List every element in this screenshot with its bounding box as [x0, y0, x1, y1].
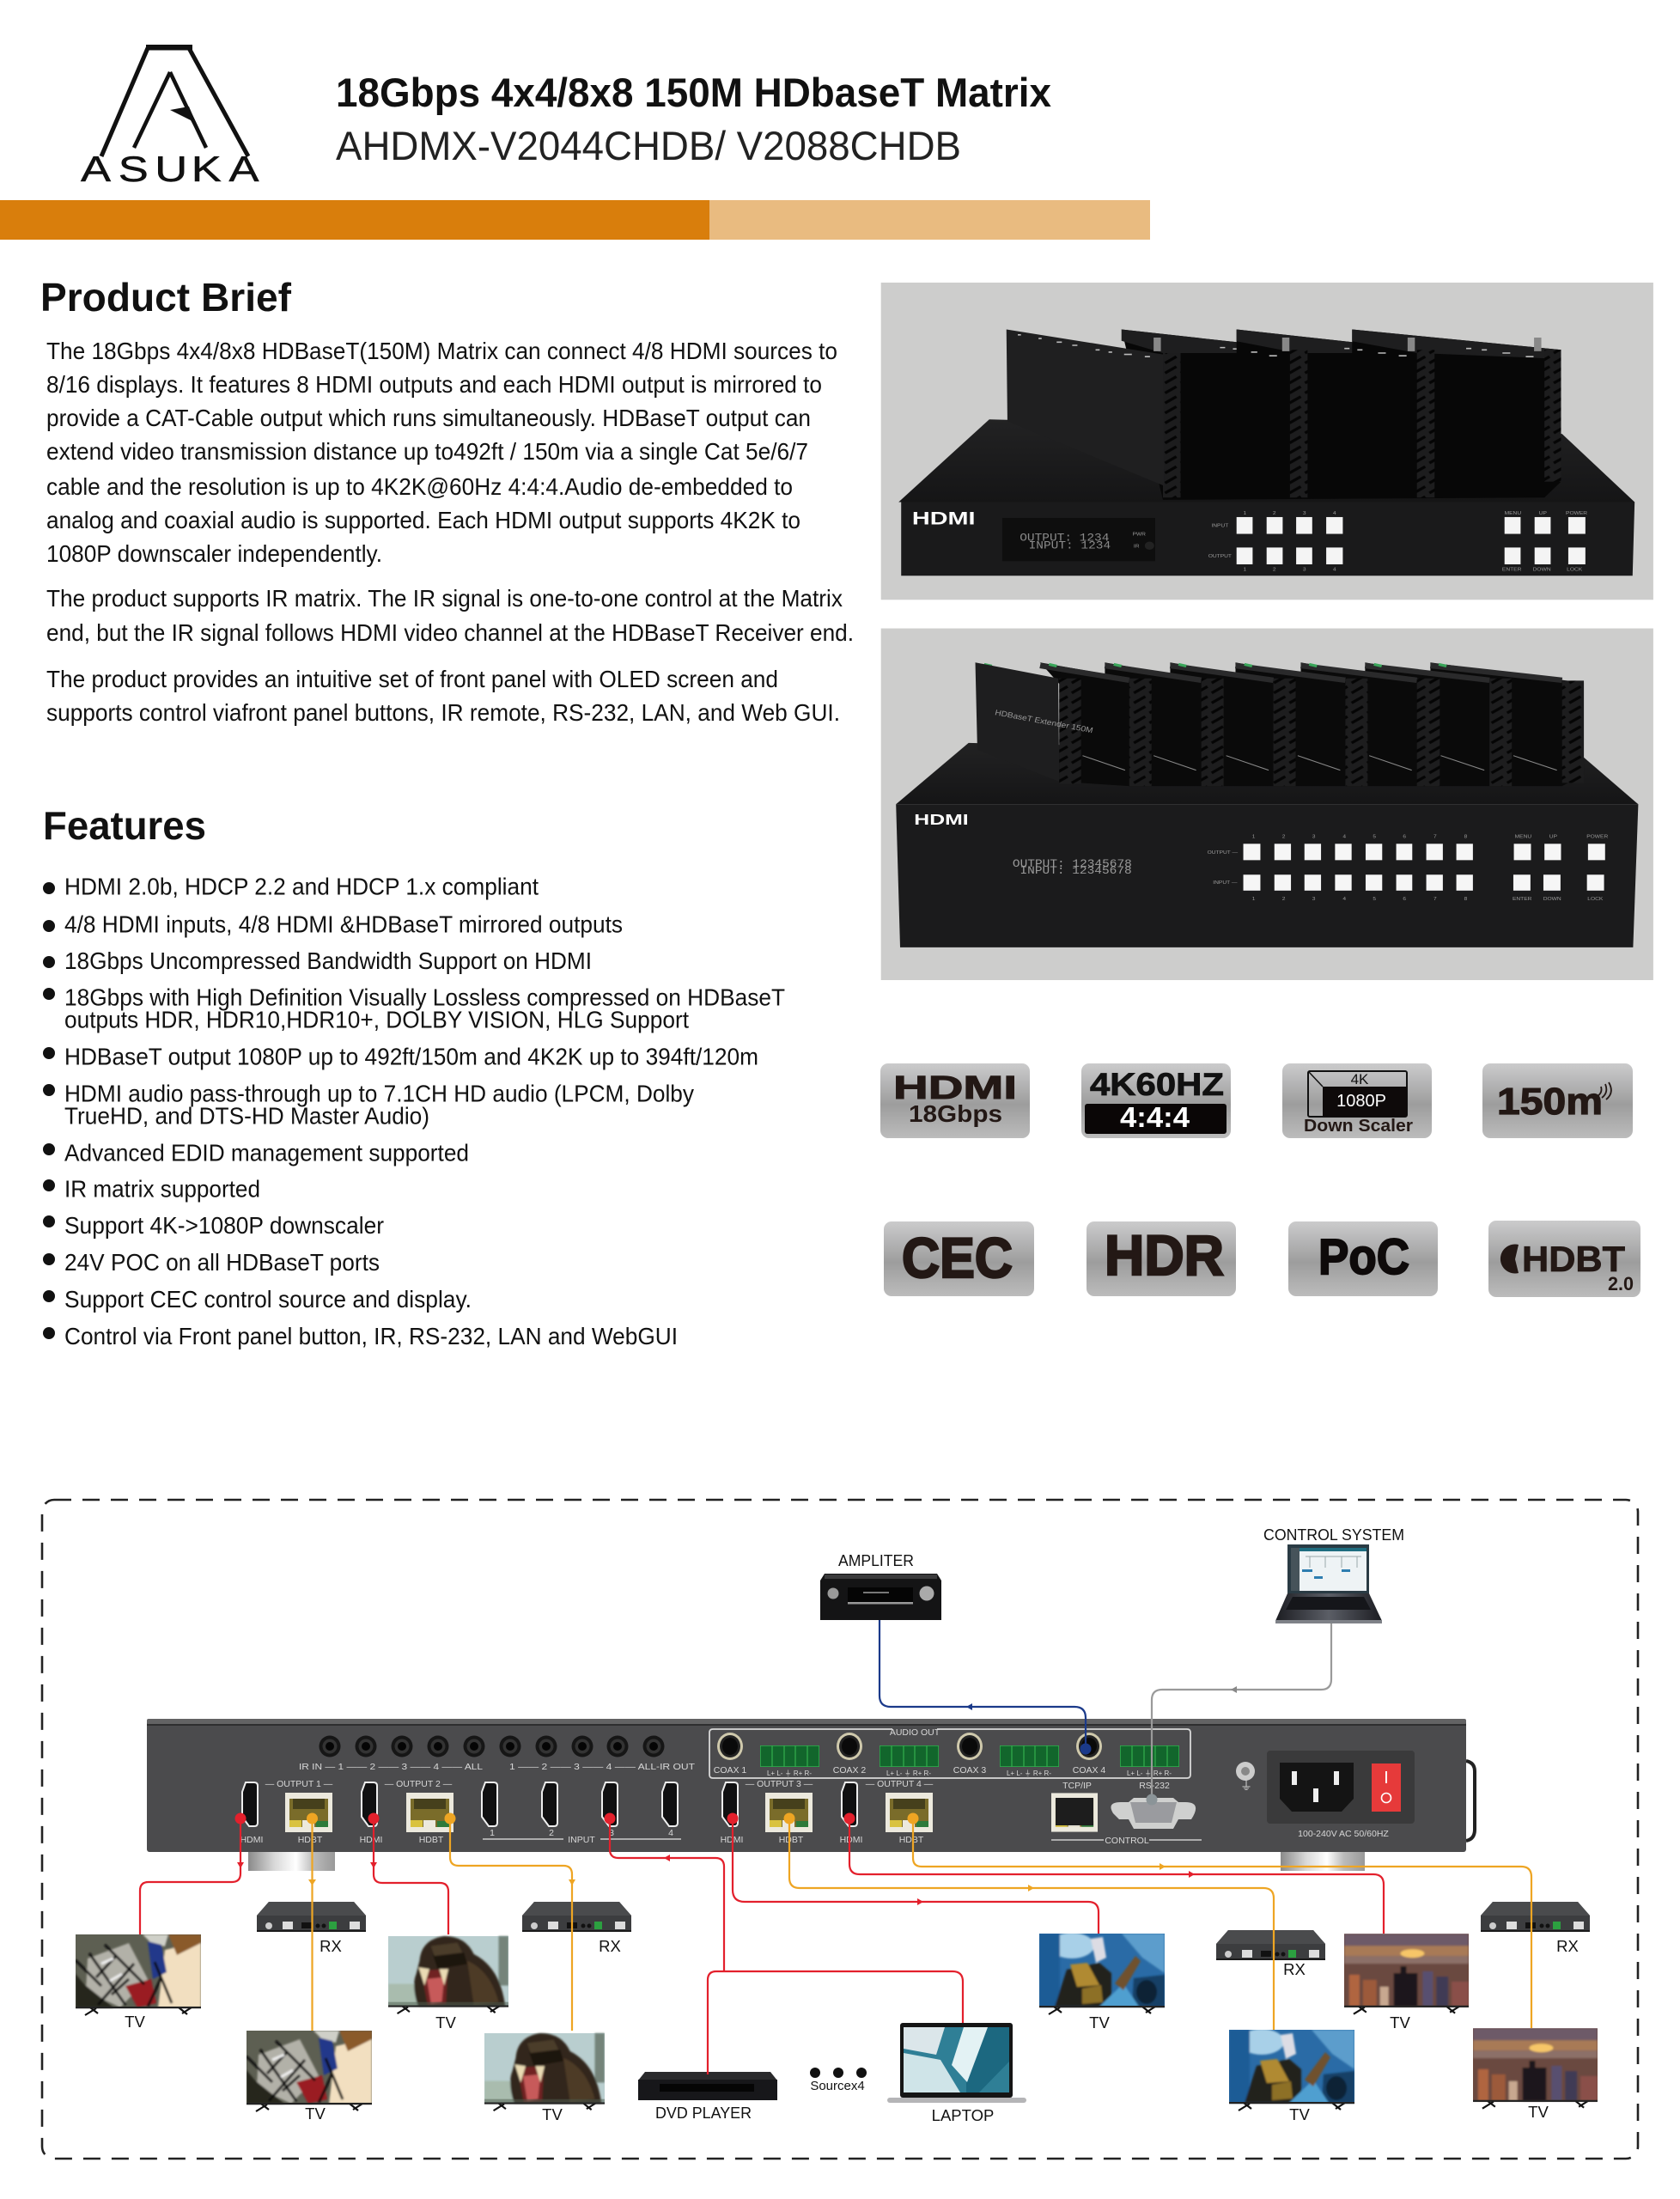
panel: connection diagram dashed frame: [42, 1500, 1638, 2159]
control ports: TCP/IP: [1062, 1781, 1092, 1791]
control ports: RS-232: [1139, 1781, 1170, 1791]
IR jacks: 1 —— 2 —— 3 —— 4 —— ALL-IR OUT: [509, 1762, 696, 1772]
badge: 4K 1080P Down Scaler: 4K: [1351, 1071, 1369, 1087]
panel: 4x4 matrix product photo: POWER: [1566, 510, 1588, 516]
panel: 8x8 matrix product photo: 1: [1252, 896, 1256, 902]
TV 6: [1344, 1934, 1469, 2014]
device: rear panel of matrix: [147, 1719, 1475, 1871]
TV 2: [388, 1936, 508, 2013]
panel: 4x4 matrix product photo: 3: [1303, 567, 1306, 572]
HDMI and HDBaseT ports: 4: [668, 1828, 673, 1838]
audio out group: L+ L- ⏚ R+ R-: [1127, 1770, 1172, 1777]
icon: source dots: [810, 2068, 867, 2078]
badge: HDMI 18Gbps: 18Gbps: [909, 1100, 1002, 1127]
HDMI and HDBaseT ports: HDBT: [298, 1835, 323, 1845]
panel: 4x4 matrix product photo: INPUT: 1234: [1029, 540, 1111, 552]
panel: 8x8 matrix product photo: 2: [1282, 834, 1286, 839]
diagram labels: TV: [1289, 2105, 1310, 2123]
subtitle: model numbers: AHDMX-V2044CHDB/ V2088CHDB: [336, 123, 961, 168]
HDMI and HDBaseT ports: — OUTPUT 1 —: [265, 1779, 333, 1789]
power inlet and switch: [1267, 1751, 1415, 1839]
text block: product brief paragraphs: supports control viafront panel buttons, IR remote, RS-232, LAN, and Web GUI.: [46, 699, 840, 726]
icon: laptop source: [887, 2023, 1026, 2103]
panel: 4x4 matrix product photo: 2: [1273, 510, 1276, 516]
audio out group: COAX 1: [714, 1765, 746, 1776]
feature list: Support CEC control source and display.: [64, 1286, 472, 1313]
badge: 4K 1080P Down Scaler: Down Scaler: [1304, 1117, 1413, 1136]
badge: 4K60HZ 4:4:4: 4:4:4: [1120, 1101, 1190, 1133]
text block: product brief paragraphs: 8/16 displays. It features 8 HDMI outputs and each HDMI output is mirrored to: [46, 371, 822, 398]
TV 3: [247, 2031, 372, 2111]
audio out group: L+ L- ⏚ R+ R-: [767, 1770, 812, 1777]
text block: product brief paragraphs: provide a CAT-Cable output which runs simultaneously. HDBaseT output can: [46, 405, 811, 431]
panel: 8x8 matrix product photo: OUTPUT —: [1208, 850, 1239, 856]
feature list: Advanced EDID management supported: [64, 1139, 469, 1167]
audio out group: L+ L- ⏚ R+ R-: [1007, 1770, 1051, 1777]
feature list: 24V POC on all HDBaseT ports: [64, 1249, 380, 1276]
panel: 8x8 matrix product photo: 1: [1252, 834, 1256, 839]
panel: 4x4 matrix product photo: INPUT: [1211, 523, 1229, 528]
TV 7: [1229, 2029, 1354, 2111]
diagram labels: [125, 1937, 1579, 2124]
panel: 8x8 matrix product photo: 7: [1433, 834, 1437, 839]
panel: 8x8 matrix product photo: 3: [1312, 834, 1316, 839]
panel: 4x4 matrix product photo: DOWN: [1533, 567, 1551, 572]
ground screw: ⏚: [1240, 1779, 1252, 1793]
badge: HDMI 18Gbps: HDMI: [893, 1070, 1017, 1106]
panel: 8x8 matrix product photo: ENTER: [1513, 896, 1532, 902]
panel: 4x4 matrix product photo: [881, 283, 1653, 600]
heading: Features: Features: [43, 803, 206, 848]
panel: 8x8 matrix product photo: 8: [1464, 834, 1468, 839]
IR jacks: [299, 1735, 696, 1772]
panel: 8x8 matrix product photo: 5: [1373, 834, 1377, 839]
panel: 4x4 matrix product photo: OUTPUT: 1234: [1020, 533, 1109, 545]
RX receiver 3: [1216, 1930, 1325, 1960]
panel: 8x8 matrix product photo: 8: [1464, 896, 1468, 902]
diagram labels: TV: [125, 2013, 145, 2031]
wires: orange HDBaseT lines: [313, 1818, 1531, 2031]
RX receiver 4: [1481, 1902, 1590, 1932]
badge: CEC: CEC: [902, 1226, 1013, 1289]
audio out group: L+ L- ⏚ R+ R-: [886, 1770, 931, 1777]
wire: grey control line: [1152, 1623, 1331, 1800]
HDMI and HDBaseT ports: HDMI: [840, 1835, 862, 1845]
text block: product brief paragraphs: extend video transmission distance up to492ft / 150m via a single Cat 5e/6/7: [46, 438, 808, 465]
panel: 4x4 matrix product photo: ENTER: [1502, 567, 1522, 572]
side handle: [1466, 1761, 1475, 1841]
rear feet: [248, 1852, 1365, 1871]
HDMI and HDBaseT ports: 2: [549, 1828, 554, 1838]
HDMI and HDBaseT ports: HDBT: [779, 1835, 804, 1845]
label: CONTROL SYSTEM: CONTROL SYSTEM: [1263, 1526, 1404, 1544]
ground screw: [1236, 1762, 1255, 1793]
feature list: outputs HDR, HDR10,HDR10+, DOLBY VISION, HLG Support: [64, 1007, 689, 1032]
badge: CEC: [884, 1221, 1034, 1296]
panel: 4x4 matrix product photo: MENU: [1505, 510, 1522, 516]
panel: 8x8 matrix product photo: INPUT —: [1213, 880, 1238, 886]
wire: blue coax to amplifier: [880, 1620, 1086, 1749]
panel: 8x8 matrix product photo: POWER: [1586, 834, 1609, 839]
badge: PoC: [1288, 1221, 1438, 1296]
panel: 4x4 matrix product photo: PWR: [1132, 532, 1146, 538]
HDMI and HDBaseT ports: HDBT: [419, 1835, 444, 1845]
panel: 8x8 matrix product photo: MENU: [1515, 834, 1532, 839]
panel: 8x8 matrix product photo: INPUT: 12345678: [1020, 866, 1132, 878]
title: 18Gbps 4x4/8x8 150M HDbaseT Matrix: [336, 70, 1051, 115]
feature list: HDBaseT output 1080P up to 492ft/150m and 4K2K up to 394ft/120m: [64, 1043, 758, 1070]
badge: PoC: PoC: [1318, 1229, 1409, 1285]
badge: HDBaseT 2.0: HDBT: [1522, 1239, 1625, 1279]
diagram labels: TV: [1390, 2013, 1410, 2031]
panel: 4x4 matrix product photo: 4: [1333, 567, 1336, 572]
panel: 8x8 matrix product photo: 4: [1342, 896, 1347, 902]
diagram labels: LAPTOP: [932, 2106, 994, 2124]
panel: 4x4 matrix product photo: IR: [1134, 544, 1140, 549]
panel: 8x8 matrix product photo: 5: [1373, 896, 1377, 902]
panel: 4x4 matrix product photo: LOCK: [1567, 567, 1583, 572]
text block: product brief paragraphs: analog and coaxial audio is supported. Each HDMI output supports 4K2K to: [46, 507, 800, 533]
text block: product brief paragraphs: The product provides an intuitive set of front panel with OLED screen and: [46, 666, 778, 692]
badge: HDMI 18Gbps: [880, 1063, 1030, 1138]
HDMI and HDBaseT ports: HDMI: [240, 1835, 263, 1845]
badge: 4K 1080P Down Scaler: 1080P: [1336, 1092, 1386, 1111]
label: AMPLITER: AMPLITER: [838, 1551, 914, 1569]
feature list: HDMI 2.0b, HDCP 2.2 and HDCP 1.x compliant: [64, 873, 539, 900]
TV 8: [1473, 2028, 1598, 2109]
audio out group: [709, 1727, 1190, 1778]
panel: 4x4 matrix product photo: 2: [1273, 567, 1276, 572]
badge: HDBaseT 2.0: [1488, 1221, 1640, 1297]
text block: product brief paragraphs: end, but the IR signal follows HDMI video channel at the HDBaseT Receiver end.: [46, 619, 854, 646]
diagram labels: TV: [305, 2105, 326, 2123]
badge: HDR: [1087, 1221, 1236, 1296]
badge: 150m: [1482, 1063, 1633, 1138]
logo: ASUKA: ASUKA: [81, 149, 259, 190]
HDMI and HDBaseT ports: 1: [490, 1828, 495, 1838]
HDMI and HDBaseT ports: INPUT: [568, 1835, 595, 1845]
icon: amplifier: [820, 1574, 941, 1620]
panel: 8x8 matrix product photo: 6: [1403, 896, 1407, 902]
HDMI and HDBaseT ports: HDMI: [360, 1835, 382, 1845]
diagram labels: TV: [1089, 2013, 1110, 2031]
audio out group: AUDIO OUT: [890, 1727, 940, 1738]
badge: 4K60HZ 4:4:4: [1081, 1063, 1231, 1138]
header colour bar: [0, 200, 1150, 240]
HDMI and HDBaseT ports: [240, 1779, 934, 1845]
badge: HDR: HDR: [1105, 1223, 1224, 1287]
feature list: 4/8 HDMI inputs, 4/8 HDMI &HDBaseT mirrored outputs: [64, 911, 623, 938]
panel: 4x4 matrix product photo: 1: [1244, 510, 1247, 516]
HDMI and HDBaseT ports: HDBT: [899, 1835, 924, 1845]
diagram labels: RX: [599, 1937, 621, 1955]
diagram labels: TV: [542, 2105, 563, 2123]
chassis: [147, 1719, 1466, 1852]
panel: 8x8 matrix product photo: 3: [1312, 896, 1316, 902]
diagram labels: TV: [435, 2013, 456, 2031]
feature list: [43, 873, 785, 1349]
audio out group: COAX 4: [1073, 1765, 1105, 1776]
RX receiver 1: [257, 1902, 366, 1932]
panel: 8x8 matrix product photo: UP: [1549, 834, 1557, 839]
TV 1: [76, 1934, 201, 2015]
panel: 4x4 matrix product photo: OUTPUT: [1208, 553, 1232, 559]
icon: control laptop: [1275, 1544, 1382, 1623]
feature list: 18Gbps with High Definition Visually Lossless compressed on HDBaseT: [64, 984, 785, 1010]
power inlet and switch: 100-240V AC 50/60HZ: [1298, 1829, 1389, 1839]
badge: 4K 1080P Down Scaler: [1282, 1063, 1432, 1138]
TV 5: [1039, 1933, 1165, 2014]
HDMI and HDBaseT ports: — OUTPUT 2 —: [385, 1779, 453, 1789]
panel: 4x4 matrix product photo: HDMI: [912, 508, 976, 528]
panel: 8x8 matrix product photo: HDMI: [914, 812, 969, 829]
badge: 150m: 150m: [1497, 1081, 1603, 1123]
feature list: Support 4K->1080P downscaler: [64, 1212, 384, 1239]
feature list: IR matrix supported: [64, 1175, 260, 1203]
panel: 8x8 matrix product photo: LOCK: [1587, 896, 1604, 902]
control ports: CONTROL: [1105, 1836, 1149, 1846]
badge: 4K60HZ 4:4:4: 4K60HZ: [1090, 1067, 1224, 1102]
panel: 8x8 matrix product photo: DOWN: [1543, 896, 1561, 902]
feature list: HDMI audio pass-through up to 7.1CH HD audio (LPCM, Dolby: [64, 1081, 694, 1106]
diagram labels: RX: [320, 1937, 342, 1955]
diagram labels: RX: [1556, 1937, 1579, 1955]
panel: 4x4 matrix product photo: 3: [1303, 510, 1306, 516]
diagram labels: Sourcex4: [810, 2079, 865, 2093]
text block: product brief paragraphs: cable and the resolution is up to 4K2K@60Hz 4:4:4.Audio de-embedded to: [46, 473, 793, 500]
connection dots and arrows: [235, 1686, 1237, 1905]
panel: 4x4 matrix product photo: 4: [1333, 510, 1336, 516]
audio out group: COAX 2: [833, 1765, 866, 1776]
text block: product brief paragraphs: The product supports IR matrix. The IR signal is one-to-one control at the Matrix: [46, 585, 843, 612]
feature list: Control via Front panel button, IR, RS-232, LAN and WebGUI: [64, 1323, 678, 1349]
diagram labels: TV: [1528, 2103, 1549, 2121]
logo: ASUKA: [81, 45, 259, 190]
panel: 8x8 matrix product photo: 7: [1433, 896, 1437, 902]
icon: DVD player: [638, 2072, 777, 2100]
panel: 4x4 matrix product photo: UP: [1539, 510, 1547, 516]
heading: Product Brief: Product Brief: [40, 275, 292, 320]
text block: product brief paragraphs: 1080P downscaler independently.: [46, 540, 382, 567]
panel: 8x8 matrix product photo: OUTPUT: 12345678: [1013, 858, 1132, 870]
IR jacks: IR IN — 1 —— 2 —— 3 —— 4 —— ALL: [299, 1762, 483, 1772]
HDMI and HDBaseT ports: HDMI: [721, 1835, 743, 1845]
TV 4: [484, 2033, 605, 2111]
control ports: [1051, 1781, 1202, 1846]
badge: HDBaseT 2.0: 2.0: [1608, 1273, 1634, 1294]
panel: 8x8 matrix product photo: [881, 629, 1653, 980]
panel: 4x4 matrix product photo: 1: [1244, 567, 1247, 572]
diagram labels: RX: [1283, 1960, 1306, 1978]
panel: 8x8 matrix product photo: HDBaseT Extender 150M: [994, 709, 1094, 735]
HDMI and HDBaseT ports: — OUTPUT 4 —: [866, 1779, 934, 1789]
audio out group: COAX 3: [953, 1765, 986, 1776]
panel: 8x8 matrix product photo: 4: [1342, 834, 1347, 839]
feature list: TrueHD, and DTS-HD Master Audio): [64, 1103, 429, 1129]
wires: red HDMI lines: [140, 1818, 1384, 2074]
HDMI and HDBaseT ports: 3: [609, 1828, 614, 1838]
text block: product brief paragraphs: The 18Gbps 4x4/8x8 HDBaseT(150M) Matrix can connect 4/8 HDMI sources to: [46, 338, 837, 364]
text block: product brief paragraphs: [46, 338, 854, 726]
RX receiver 2: [522, 1902, 631, 1932]
panel: 8x8 matrix product photo: 6: [1403, 834, 1407, 839]
diagram labels: DVD PLAYER: [655, 2104, 752, 2122]
panel: 8x8 matrix product photo: 2: [1282, 896, 1286, 902]
feature list: 18Gbps Uncompressed Bandwidth Support on HDMI: [64, 947, 592, 974]
HDMI and HDBaseT ports: — OUTPUT 3 —: [746, 1779, 813, 1789]
